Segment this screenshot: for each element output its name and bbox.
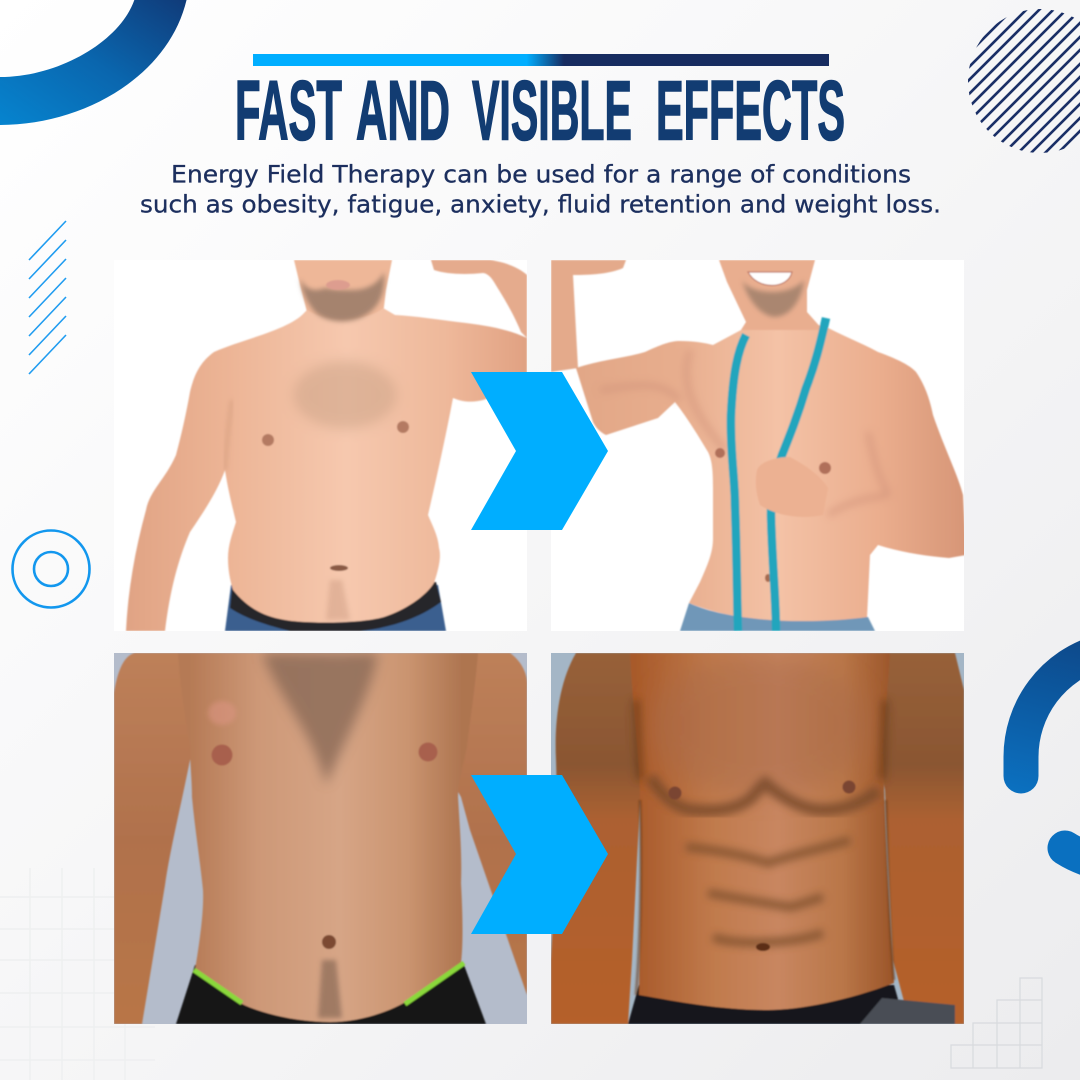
belly hair — [318, 960, 342, 1018]
head and neck — [294, 260, 393, 320]
left arm — [551, 653, 641, 1024]
beard — [742, 280, 804, 317]
upper chest tone — [650, 655, 870, 795]
torso — [178, 653, 478, 1022]
raised arm and fist — [551, 260, 626, 372]
chest hair — [262, 653, 378, 785]
chest hair — [293, 361, 397, 429]
navel — [322, 935, 336, 949]
torso and arms — [576, 325, 966, 622]
arrow: bottom — [471, 775, 608, 934]
decorative grid: bottom left — [0, 868, 155, 1080]
nipples — [212, 744, 232, 766]
photo panel: before, torso — [114, 653, 527, 1024]
abdominal midline hair — [324, 790, 326, 925]
photo panel: after, standing — [551, 260, 966, 631]
title — [235, 64, 845, 158]
decorative hatched circle: top right — [968, 9, 1080, 153]
navel — [756, 943, 770, 951]
armpit shadows — [636, 700, 885, 780]
jeans — [225, 585, 446, 631]
green waistband — [194, 963, 464, 1004]
belt — [230, 582, 441, 631]
decorative arc: right — [1021, 652, 1080, 864]
underwear — [176, 965, 486, 1024]
subtitle — [140, 160, 941, 218]
pectoral shadows — [650, 777, 878, 810]
nipples — [715, 448, 725, 458]
photo panel: before, standing — [114, 260, 527, 631]
arm shadow — [225, 400, 232, 470]
navel — [765, 574, 771, 582]
smile — [748, 272, 792, 286]
hand — [756, 457, 828, 517]
abdominal shadows — [686, 840, 850, 943]
subtitle: such as obesity, fatigue, anxiety, fluid retention and weight loss. — [140, 190, 941, 218]
heading accent bar — [253, 54, 829, 66]
title: VISIBLE — [472, 64, 632, 158]
lips — [326, 280, 350, 290]
decorative arc: top left — [0, 0, 187, 125]
nipples — [262, 434, 274, 446]
title: AND — [356, 64, 450, 158]
decorative diagonal lines: left — [29, 221, 66, 374]
arm and torso seams — [636, 800, 894, 995]
torso — [630, 653, 894, 1010]
title: FAST — [235, 64, 342, 158]
decorative stepped grid: bottom right — [951, 978, 1042, 1068]
navel — [330, 565, 348, 571]
jeans — [680, 603, 875, 631]
right arm — [440, 653, 527, 995]
subtitle: Energy Field Therapy can be used for a range of conditions — [171, 160, 911, 188]
arrow: top — [471, 372, 608, 530]
dumbbell — [860, 998, 955, 1024]
right arm — [860, 653, 964, 1024]
text: EFFECTS — [656, 64, 845, 158]
beard — [300, 272, 384, 321]
photo panel: after, torso — [551, 653, 964, 1024]
nipples — [668, 786, 682, 800]
tape measure — [731, 318, 826, 631]
rash patch — [208, 701, 236, 725]
raised forearm and fist — [431, 260, 527, 338]
decorative concentric circles — [12, 530, 90, 608]
head and neck — [719, 260, 823, 330]
muscle shadow — [632, 354, 888, 516]
torso and arms — [126, 308, 527, 631]
belly hair — [326, 580, 350, 620]
underwear — [628, 985, 905, 1024]
left arm — [114, 653, 200, 1024]
